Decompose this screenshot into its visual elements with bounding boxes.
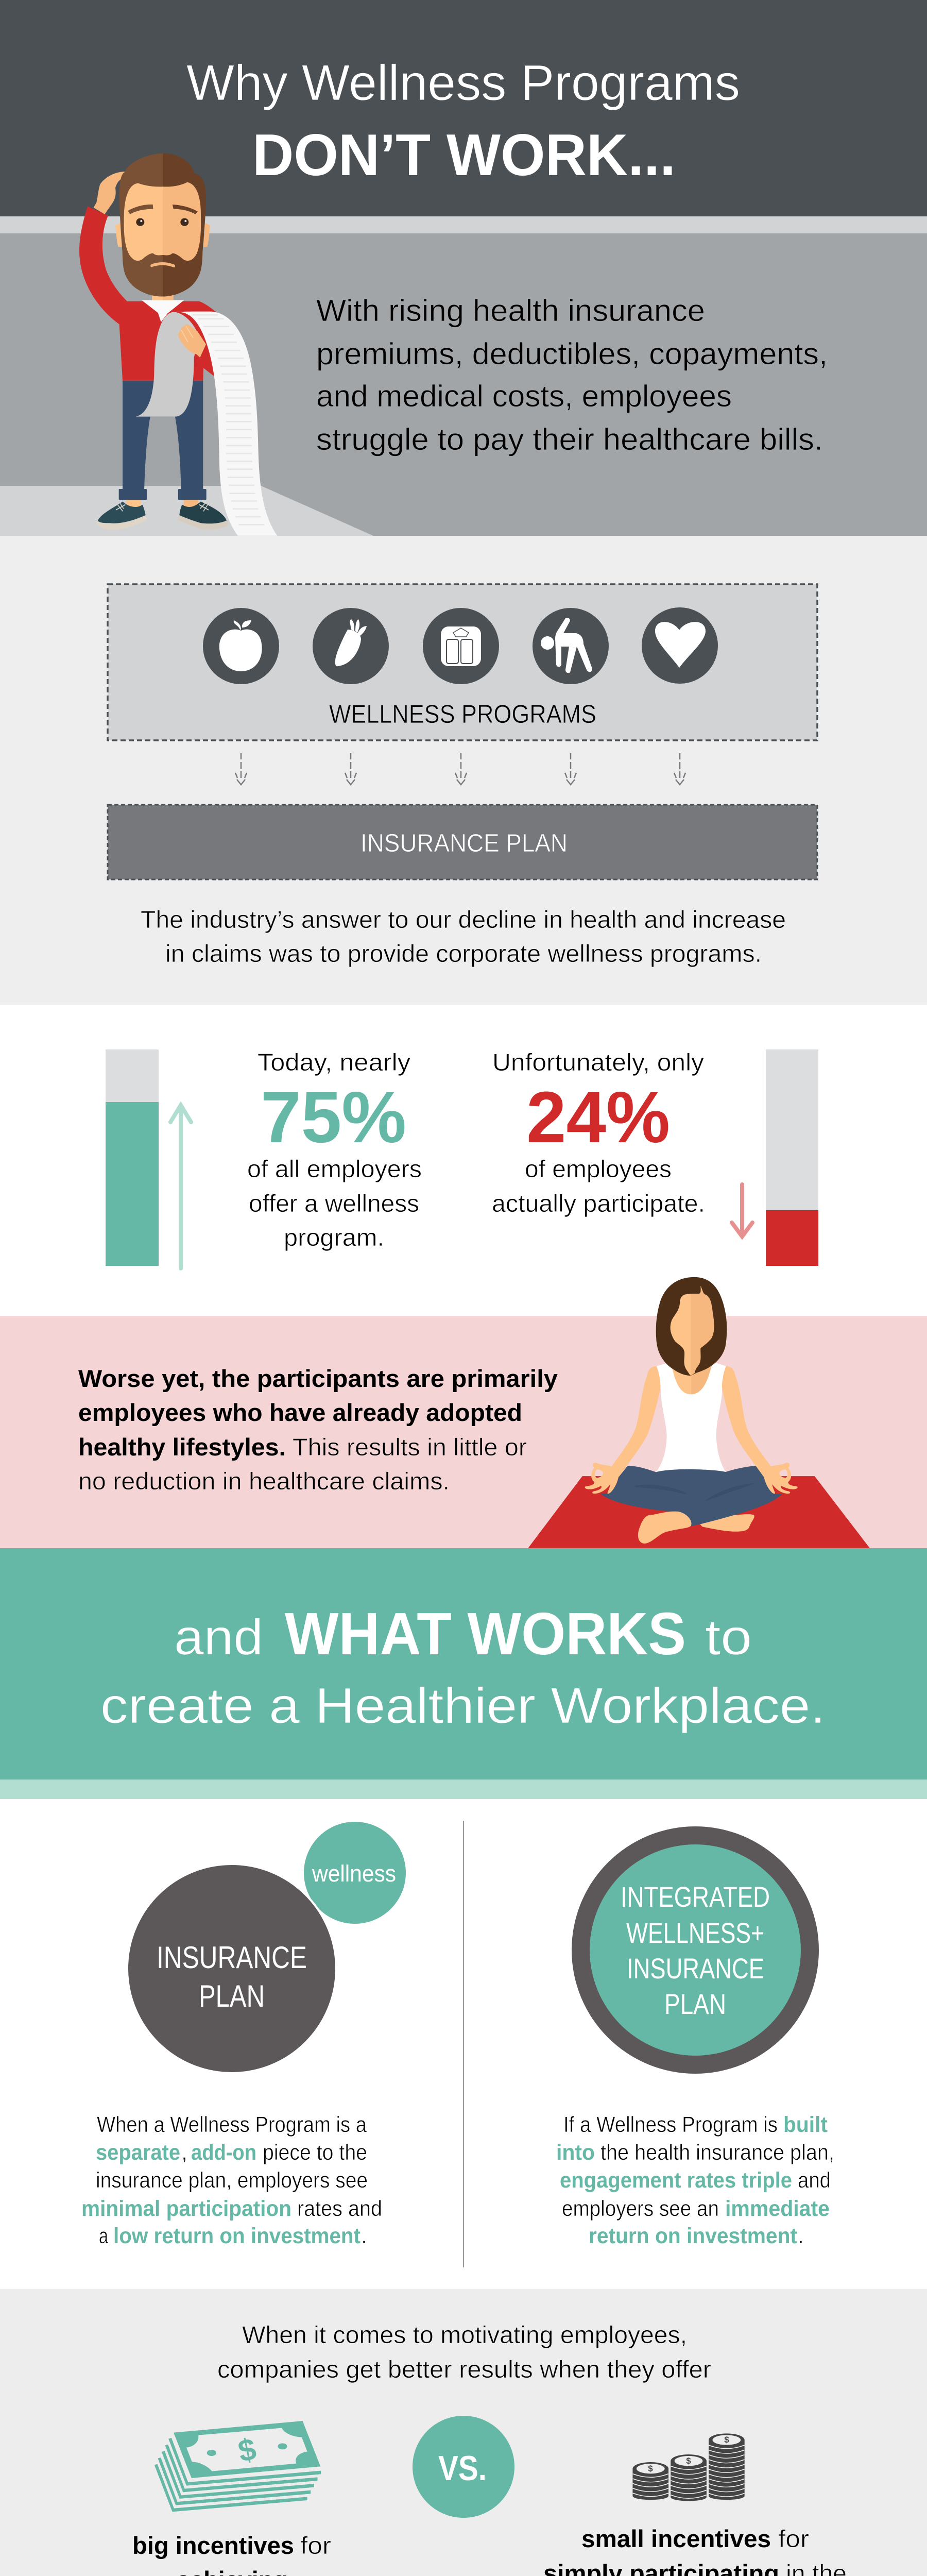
text: participants already healthy: This results in little or [293,1433,527,1461]
text: industry's answer: in claims was to provide corporate wellness programs. [165,940,762,967]
label: wellness programs: WELLNESS PROGRAMS [329,700,596,728]
heading: what works [100,1600,826,1734]
panel: statistics [0,1005,927,1316]
text: rising health costs: and medical costs, employees [316,379,732,413]
text: built into plan: engagement rates triple [560,2168,792,2193]
text: built into plan: built [783,2112,828,2137]
text: built into plan [556,2112,834,2248]
icon: stacks of coins: $ [724,2435,729,2445]
text: participants already healthy [78,1365,558,1495]
text: rising health costs: premiums, deductibles, copayments, [316,337,828,371]
text: separate add-on [81,2112,382,2248]
heading: what works: and [174,1609,263,1665]
heading: what works: to [705,1609,752,1665]
text: rising health costs [316,294,828,456]
icon: stack of money: $ [235,2431,259,2469]
heading: what works: create a Healthier Workplace. [100,1677,826,1734]
text: separate add-on: , [181,2140,187,2165]
diagram: separate wellness circle: PLAN [199,1979,265,2013]
text: separate add-on: When a Wellness Program is a [97,2112,367,2137]
divider [463,1821,464,2267]
text: separate add-on: separate [96,2140,180,2165]
text: participants already healthy: healthy lifestyles. [78,1433,286,1461]
text: built into plan: employers see an [562,2196,719,2221]
text: separate add-on: piece to the [263,2140,367,2165]
title [186,55,740,188]
text: participants already healthy: employees who have already adopted [78,1399,522,1426]
text: separate add-on: minimal participation [81,2196,291,2221]
icon: apple [203,608,279,684]
panel: wellness programs diagram [0,536,927,1005]
stat: 75 percent of employers: of all employers [247,1155,422,1182]
text: small incentives: for [778,2525,809,2552]
illustration: woman meditating on mat [528,1277,870,1548]
stat: 24 percent of employees: actually participate. [492,1190,705,1217]
box: wellness programs [108,584,817,740]
diagram: separate wellness circle [127,1822,406,2073]
diagram: integrated circle: INTEGRATED [621,1880,770,1913]
text: built into plan: into [556,2140,595,2165]
arrows: programs feed into plan [235,753,685,785]
text: separate add-on: . [361,2224,367,2248]
text: built into plan: immediate [725,2196,830,2221]
icon: heart [642,607,718,684]
panel: worse yet [0,1277,927,1548]
stat: 24 percent of employees [492,1048,705,1217]
text: rising health costs: With rising health insurance [316,294,705,328]
text: industry's answer: The industry’s answer to our decline in health and increase [141,906,786,933]
panel: separate vs integrated [0,1799,927,2289]
icon: scale [423,608,499,684]
icon: stacks of coins: $ [686,2456,691,2466]
diagram: integrated circle: INSURANCE [627,1952,764,1985]
text: built into plan: If a Wellness Program is [563,2112,778,2137]
text: motivating employees: companies get better results when they offer [217,2355,711,2383]
stat: 75 percent of employers [247,1048,422,1251]
bar chart: 75 percent [106,1049,159,1266]
diagram: separate wellness circle: wellness [312,1860,396,1887]
stat: 75 percent of employers: 75% [261,1076,406,1158]
illustration: man holding long bill [79,153,277,536]
icon: stacks of coins: $ [648,2464,653,2473]
badge: vs: VS. [438,2449,487,2488]
diagram: integrated circle [572,1826,819,2074]
text: built into plan: and [798,2168,831,2193]
text: separate add-on: add-on [191,2140,256,2165]
icon: stacks of coins [632,2433,745,2501]
text: big incentives: for [300,2532,331,2559]
stat: 24 percent of employees: Unfortunately, only [492,1048,705,1076]
heading: what works: WHAT WORKS [285,1600,686,1667]
text: small incentives: small incentives [581,2525,771,2552]
title: Why Wellness Programs [186,55,740,111]
arrow: down [732,1184,752,1236]
text: motivating employees: When it comes to motivating employees, [242,2321,687,2348]
text: big incentives: big incentives [132,2532,294,2559]
panel: what works banner [0,1548,927,1799]
bar chart: 24 percent [766,1049,818,1266]
text: separate add-on: rates and [297,2196,382,2221]
diagram: separate wellness circle: INSURANCE [157,1940,307,1975]
text: industry's answer [141,906,786,967]
panel: big vs small incentives [0,2289,927,2576]
arrow: up [170,1105,191,1268]
stat: 75 percent of employers: program. [284,1224,384,1251]
badge: vs [413,2416,514,2518]
text: motivating employees [217,2321,711,2383]
stat: 75 percent of employers: offer a wellness [249,1190,419,1217]
box: insurance plan: INSURANCE PLAN [360,829,568,857]
stat: 24 percent of employees: 24% [526,1076,670,1158]
text: separate add-on: a [99,2224,108,2248]
text: rising health costs: struggle to pay their healthcare bills. [316,422,823,456]
text: participants already healthy: no reduction in healthcare claims. [78,1467,450,1495]
text: built into plan: return on investment [589,2224,797,2248]
panel: header [0,0,927,536]
icon: stack of money [154,2421,321,2512]
stat: 75 percent of employers: Today, nearly [258,1048,411,1076]
text: small incentives [543,2525,847,2576]
text: built into plan: the health insurance plan, [600,2140,834,2165]
title: DON’T WORK... [252,123,676,188]
text: participants already healthy: Worse yet, the participants are primarily [78,1365,558,1392]
icon: carrot [313,608,389,684]
diagram: integrated circle: WELLNESS+ [626,1917,764,1949]
stat: 24 percent of employees: of employees [525,1155,672,1182]
icon: stretching figure [533,608,609,684]
text: separate add-on: low return on investment [113,2224,360,2248]
text: built into plan: . [798,2224,804,2248]
text: separate add-on: insurance plan, employers see [96,2168,368,2193]
box: insurance plan [108,805,817,879]
text: big incentives [132,2532,331,2576]
diagram: integrated circle: PLAN [664,1988,726,2020]
